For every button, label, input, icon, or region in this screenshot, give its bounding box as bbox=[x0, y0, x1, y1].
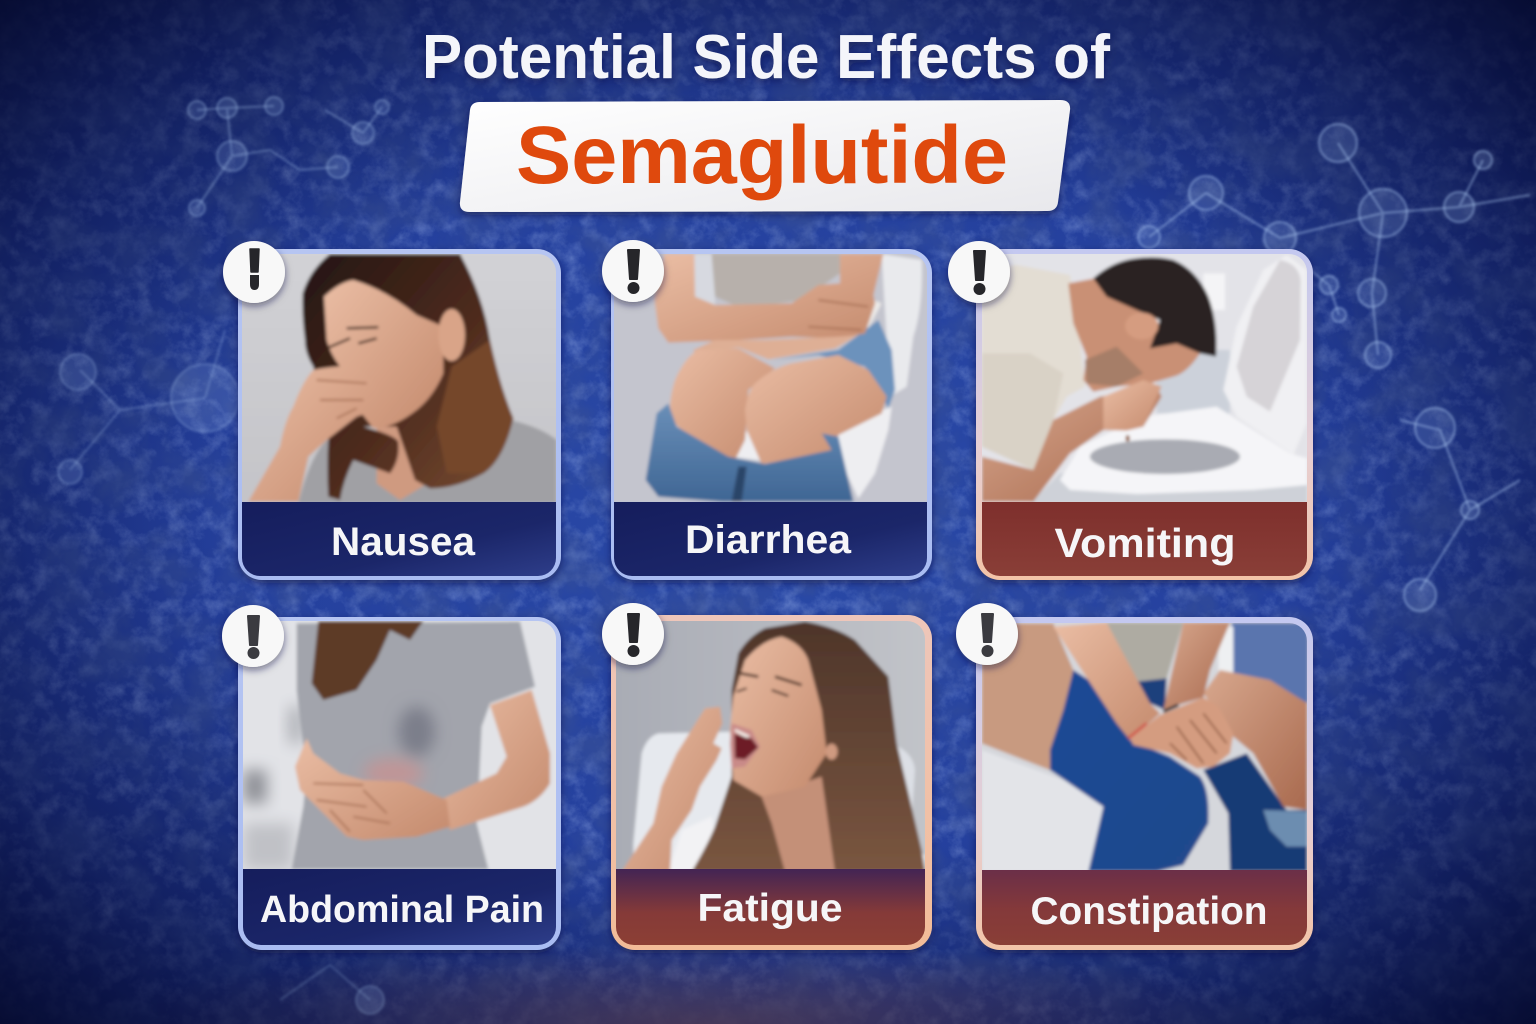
icon: warning badge bbox=[602, 603, 664, 665]
icon: warning badge bbox=[948, 241, 1010, 303]
label band: Diarrhea: Diarrhea bbox=[685, 518, 852, 562]
panel: diarrhea bbox=[602, 240, 945, 580]
photo: woman pinching nose bbox=[230, 250, 570, 503]
photo: man on toilet with clasped hands bbox=[982, 623, 1307, 870]
panel: fatigue bbox=[602, 603, 945, 950]
label band: Fatigue bbox=[613, 869, 930, 949]
label band: Abdominal Pain: Abdominal Pain bbox=[260, 889, 544, 931]
photo: man vomiting into toilet bbox=[970, 250, 1323, 503]
title: Potential Side Effects of bbox=[422, 23, 1110, 92]
label band: Nausea bbox=[240, 502, 559, 579]
panel: constipation bbox=[956, 603, 1323, 950]
photo: woman holding abdomen bbox=[243, 621, 556, 869]
label band: Fatigue: Fatigue bbox=[698, 887, 842, 930]
label band: Constipation bbox=[978, 870, 1311, 949]
label band: Vomiting bbox=[978, 502, 1311, 579]
panel: vomiting bbox=[948, 241, 1323, 580]
title plaque: Semaglutide: Semaglutide bbox=[516, 110, 1008, 201]
icon: warning badge bbox=[222, 605, 284, 667]
icon: warning badge bbox=[956, 603, 1018, 665]
icon: warning badge bbox=[223, 241, 285, 303]
icon: warning badge bbox=[602, 240, 664, 302]
label band: Abdominal Pain bbox=[240, 869, 559, 949]
panel: abdominal pain bbox=[222, 605, 570, 950]
panel: nausea bbox=[223, 241, 570, 580]
title plaque: Semaglutide bbox=[460, 100, 1070, 212]
label band: Vomiting: Vomiting bbox=[1054, 520, 1236, 566]
photo: person on toilet holding stomach bbox=[605, 250, 945, 503]
label band: Nausea: Nausea bbox=[331, 520, 476, 564]
label band: Constipation: Constipation bbox=[1030, 890, 1268, 933]
photo: woman yawning bbox=[616, 621, 925, 869]
label band: Diarrhea bbox=[613, 502, 930, 579]
